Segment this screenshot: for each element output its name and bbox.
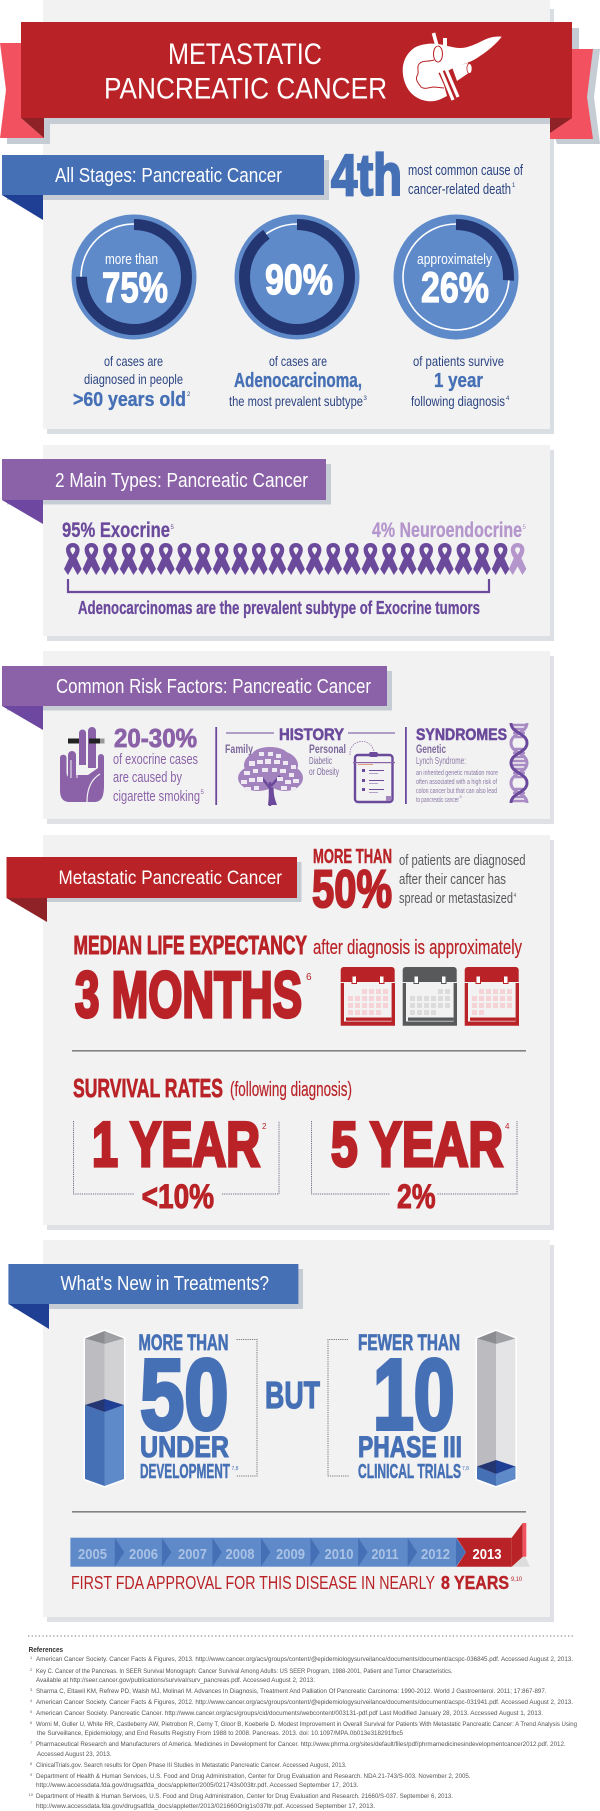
- stat: more than 50%: after their cancer has: [399, 872, 506, 888]
- icon: family tree: [238, 747, 303, 806]
- stat: fewer than 10: [358, 1330, 469, 1483]
- donut chart: 90%: [234, 214, 360, 340]
- caption: adenocarcinoma: the most prevalent subtype: [229, 393, 363, 409]
- ribbon: all stages header: [2, 155, 329, 220]
- stat: smoking: [113, 723, 204, 805]
- caption: adenocarcinoma: [229, 353, 368, 409]
- panel: common risk factors: [2, 651, 554, 824]
- stat: more than 50: MORE THAN: [138, 1330, 228, 1355]
- references: Department of Health & Human Services, U.S. Food and Drug Administration, Center for Drug Evaluation and Research. NDA 21-743/S-003. November 2, 2005.: [36, 1773, 471, 1780]
- text: but: BUT: [265, 1375, 320, 1417]
- stat: 4th most common cause: most common cause of: [408, 163, 524, 179]
- ribbon: metastatic header: [6, 857, 302, 922]
- stat: more than 50%: 50%: [312, 860, 392, 919]
- references: Key C. Cancer of the Pancreas. In SEER Survival Monograph: Cancer Survival Among Adults: US SEER Program, 1988-2001, Patient and Tumor Characteristics.: [36, 1668, 453, 1675]
- label: personal history: [309, 742, 346, 778]
- chart: 50 under development column: [85, 1331, 124, 1486]
- stat: 5 year survival: [312, 1110, 517, 1216]
- icon: pancreas: [403, 33, 502, 101]
- icon: calendar 1: [341, 967, 395, 1026]
- stat: smoking: of exocrine cases: [113, 751, 198, 768]
- references: 6: [30, 1720, 33, 1725]
- title banner: PANCREATIC CANCER: [104, 73, 387, 106]
- callout: first FDA approval: FIRST FDA APPROVAL FOR THIS DISEASE IN NEARLY: [71, 1573, 435, 1593]
- references: Available at http://seer.cancer.gov/publications/survival/surv_pancreas.pdf. Accessed August 2, 2013.: [36, 1677, 315, 1684]
- timeline: 2005 to 2013: 2009: [276, 1546, 305, 1563]
- caption: adenocarcinoma: Adenocarcinoma,: [234, 370, 362, 392]
- stat: smoking: cigarette smoking: [113, 788, 200, 805]
- caption: survive 1 year: following diagnosis: [411, 393, 505, 409]
- stat: more than 50%: of patients are diagnosed: [399, 853, 526, 869]
- label: 4% neuroendocrine: 5: [522, 525, 526, 531]
- references: http://www.accessdata.fda.gov/drugsatfda_docs/appletter/2013/021660Orig1s037ltr.pdf. Accessed September 17, 2013.: [36, 1803, 375, 1810]
- label: family: Family: [225, 742, 253, 756]
- donut chart: 26%: 26%: [421, 264, 489, 312]
- references: 4: [30, 1698, 33, 1703]
- ribbon: metastatic header: Metastatic Pancreatic Cancer: [58, 868, 283, 889]
- stat: 5 year survival: 4: [505, 1122, 510, 1131]
- stat: more than 50%: spread or metastasized: [399, 891, 513, 907]
- heading: survival rates: SURVIVAL RATES: [73, 1073, 223, 1103]
- references: 8: [30, 1761, 33, 1766]
- timeline: 2005 to 2013: [70, 1523, 530, 1567]
- stat: fewer than 10: FEWER THAN: [358, 1330, 460, 1355]
- stat: smoking: 5: [200, 790, 204, 796]
- icon: hand with cigarette: [60, 727, 104, 802]
- ribbon: treatments header: [8, 1264, 303, 1329]
- stat: more than 50: [138, 1330, 239, 1483]
- stat: more than 50%: 4: [514, 893, 516, 899]
- references: 9: [30, 1772, 33, 1777]
- title banner: [0, 22, 600, 144]
- timeline: 2005 to 2013: 2006: [129, 1546, 158, 1563]
- callout: first FDA approval: 8 YEARS: [441, 1573, 509, 1593]
- label: 4% neuroendocrine: 4% Neuroendocrine: [372, 519, 522, 542]
- stat: 4th most common cause: cancer-related death: [408, 182, 511, 198]
- stat: 1 year survival: <10%: [142, 1178, 214, 1216]
- caption: adenocarcinoma: 3: [364, 396, 368, 402]
- icon: calendar 2: [403, 967, 457, 1026]
- caption: adenocarcinoma: of cases are: [269, 353, 327, 369]
- references: 7: [30, 1740, 33, 1745]
- caption: survive 1 year: 1 year: [434, 370, 483, 392]
- timeline: 2005 to 2013: 2013: [472, 1546, 502, 1563]
- panel: metastatic pancreatic cancer: [6, 835, 554, 1230]
- references: American Cancer Society. Pancreatic Cancer. http://www.cancer.org/acs/groups/cid/documents/webcontent/003131-pdf.pdf Last Modified January 28, 2013. Accessed August 1, 2013.: [36, 1710, 543, 1717]
- stat: more than 50%: MORE THAN: [313, 846, 392, 868]
- text: genetic syndromes: Lynch Syndrome:: [416, 755, 466, 767]
- references: References: [29, 1647, 63, 1654]
- references: the Surveillance, Epidemiology, and End Results Registry From 1988 to 2008. Pancreas. 2013. doi: 10.1097/MPA.0b013e318291fbc5: [37, 1730, 403, 1737]
- caption: survive 1 year: of patients survive: [413, 353, 504, 369]
- stat: more than 50: UNDER: [140, 1431, 229, 1464]
- timeline: 2005 to 2013: 2005: [78, 1546, 107, 1563]
- references: Pharmaceutical Research and Manufacturers of America. Medicines in Development for Cancer. http://www.phrma.org/sites/default/files/pdf/phrmamedicinesindevelopmentcancer2012.pdf. 2012.: [36, 1741, 566, 1748]
- donut chart: 26%: [394, 214, 518, 340]
- references: 1: [30, 1655, 33, 1660]
- references: Department of Health & Human Services, U.S. Food and Drug Administration, Center for Drug Evaluation and Research. 21660/S-037. September 6, 2013.: [36, 1793, 453, 1800]
- references: [28, 1647, 577, 1810]
- text: genetic syndromes: an inherited genetic mutation more: [416, 768, 498, 777]
- stat: more than 50: 50: [140, 1339, 228, 1451]
- caption: diagnosed over 60: of cases are: [104, 353, 163, 369]
- icon: clipboard: [350, 741, 395, 802]
- stat: 3 months: 6: [306, 972, 312, 983]
- references: ClinicalTrials.gov. Search results for Open Phase III Studies In Metastatic Pancreatic Cancer. Accessed August, 2013.: [36, 1762, 347, 1769]
- references: American Cancer Society. Cancer Facts & Figures, 2013. http://www.cancer.org/acs/groups/content/@epidemiologysurveilance/documents/document/acspc-036845.pdf. Accessed August 2, 2013.: [36, 1656, 573, 1663]
- timeline: 2005 to 2013: 2010: [324, 1546, 354, 1563]
- references: Accessed August 23, 2013.: [37, 1751, 112, 1758]
- timeline: 2005 to 2013: 2012: [421, 1546, 450, 1563]
- ribbon: all stages header: All Stages: Pancreatic Cancer: [55, 165, 282, 187]
- label: personal history: Personal: [309, 742, 346, 756]
- heading: history: HISTORY: [279, 725, 345, 744]
- stat: smoking: 20-30%: [114, 723, 197, 753]
- icon row: awareness ribbons: [64, 543, 526, 575]
- text: genetic syndromes: to pancreatic cancer: [416, 795, 459, 804]
- label: personal history: Diabetic: [309, 755, 332, 767]
- stat: fewer than 10: PHASE III: [358, 1431, 462, 1464]
- timeline: 2005 to 2013: 2011: [372, 1546, 398, 1563]
- chart: 10 phase III column: [477, 1331, 516, 1486]
- caption: survive 1 year: [411, 353, 510, 409]
- caption: survive 1 year: 4: [506, 396, 510, 402]
- label: personal history: or Obesity: [309, 766, 339, 778]
- ribbon: main types header: [2, 459, 331, 524]
- donut chart: 75%: more than: [105, 251, 158, 268]
- stat: 3 months: 3 MONTHS: [75, 958, 302, 1031]
- ribbon: treatments header: What's New in Treatments?: [60, 1273, 269, 1295]
- references: 10: [28, 1792, 34, 1797]
- heading: syndromes: SYNDROMES: [416, 725, 507, 744]
- stat: fewer than 10: 10: [373, 1339, 455, 1451]
- donut chart: 26%: approximately: [417, 251, 492, 268]
- stat: more than 50: 7,8: [232, 1466, 239, 1472]
- label: 95% exocrine: 5: [170, 525, 174, 531]
- panel: what's new in treatments: [8, 1240, 554, 1622]
- references: 5: [30, 1709, 33, 1714]
- title banner: METASTATIC: [168, 38, 322, 71]
- stat: 4th most common cause: 4th: [331, 143, 402, 208]
- donut chart: 75%: [72, 214, 196, 340]
- stat: more than 50%: [312, 846, 526, 919]
- stat: 4th most common cause: 1: [512, 183, 516, 189]
- text: genetic syndromes: 5: [460, 794, 462, 799]
- references: Sharma C, Eltawil KM, Refrew PD, Walsh MJ, Molinari M. Advances In Diagnosis, Treatment And Palliation Of Pancreatic Carcinoma: 1990-2012. World J Gastroenterol. 2011; 17:867-897.: [36, 1688, 547, 1695]
- text: genetic syndromes: [416, 742, 498, 804]
- timeline: 2005 to 2013: 2008: [226, 1546, 254, 1563]
- stat: smoking: are caused by: [113, 769, 182, 786]
- text: genetic syndromes: colon cancer but that can also lead: [416, 786, 497, 795]
- icon: dna helix: [511, 723, 527, 803]
- text: genetic syndromes: often associated with a high risk of: [416, 777, 498, 786]
- references: 2: [30, 1667, 33, 1672]
- label: 95% exocrine: 95% Exocrine: [62, 519, 170, 542]
- stat: 1 year survival: 1 YEAR: [92, 1110, 260, 1180]
- donut chart: 75%: 75%: [102, 264, 168, 312]
- stat: fewer than 10: CLINICAL TRIALS: [358, 1461, 461, 1483]
- references: American Cancer Society. Cancer Facts & Figures, 2012. http://www.cancer.org/acs/groups/content/@epidemiologysurveilance/documents/document/acspc-031941.pdf. Accessed August 2, 2013.: [36, 1699, 573, 1706]
- timeline: 2005 to 2013: 2007: [178, 1546, 207, 1563]
- stat: 5 year survival: 5 YEAR: [331, 1110, 503, 1180]
- text: genetic syndromes: Genetic: [416, 742, 446, 756]
- icon: calendar 3: [465, 967, 519, 1026]
- heading: survival rates: (following diagnosis): [230, 1079, 352, 1101]
- references: http://www.accessdata.fda.gov/drugsatfda_docs/appletter/2005/021743s003ltr.pdf. Accessed September 17, 2013.: [36, 1782, 359, 1789]
- stat: more than 50: DEVELOPMENT: [140, 1461, 230, 1483]
- caption: diagnosed over 60: diagnosed in people: [84, 371, 183, 387]
- caption: diagnosed over 60: >60 years old: [73, 389, 186, 411]
- ribbon: risk factors header: Common Risk Factors: Pancreatic Cancer: [56, 676, 371, 698]
- bracket: right: [328, 1340, 349, 1476]
- stat: 1 year survival: [74, 1110, 279, 1216]
- heading: median life expectancy: MEDIAN LIFE EXPECTANCY: [74, 930, 307, 960]
- ribbon: risk factors header: [2, 666, 392, 730]
- stat: 1 year survival: 2: [262, 1122, 267, 1131]
- references: 3: [30, 1687, 33, 1692]
- stat: 4th most common cause: [331, 143, 524, 208]
- references: Worni M, Guller U, White RR, Castleberry AW, Pietrobon R, Cerny T, Gloor B, Koeberle D. Modest Improvement in Overall Survival for Patients With Metastatic Pancreatic Cancer: A Trend Analysis Using: [36, 1721, 577, 1728]
- ribbon: main types header: 2 Main Types: Pancreatic Cancer: [55, 470, 308, 492]
- callout: first FDA approval: 9,10: [511, 1577, 523, 1583]
- donut chart: 90%: 90%: [265, 256, 333, 304]
- panel: all stages: [2, 0, 554, 434]
- panel: two main types: [2, 445, 554, 641]
- caption: diagnosed over 60: 2: [187, 392, 191, 398]
- stat: fewer than 10: 7,8: [462, 1466, 469, 1472]
- bracket: adenocarcinomas: [68, 579, 489, 592]
- caption: diagnosed over 60: [73, 353, 191, 411]
- heading: median life expectancy: after diagnosis is approximately: [313, 937, 522, 959]
- stat: 5 year survival: 2%: [397, 1178, 436, 1216]
- bracket: left: [236, 1340, 257, 1476]
